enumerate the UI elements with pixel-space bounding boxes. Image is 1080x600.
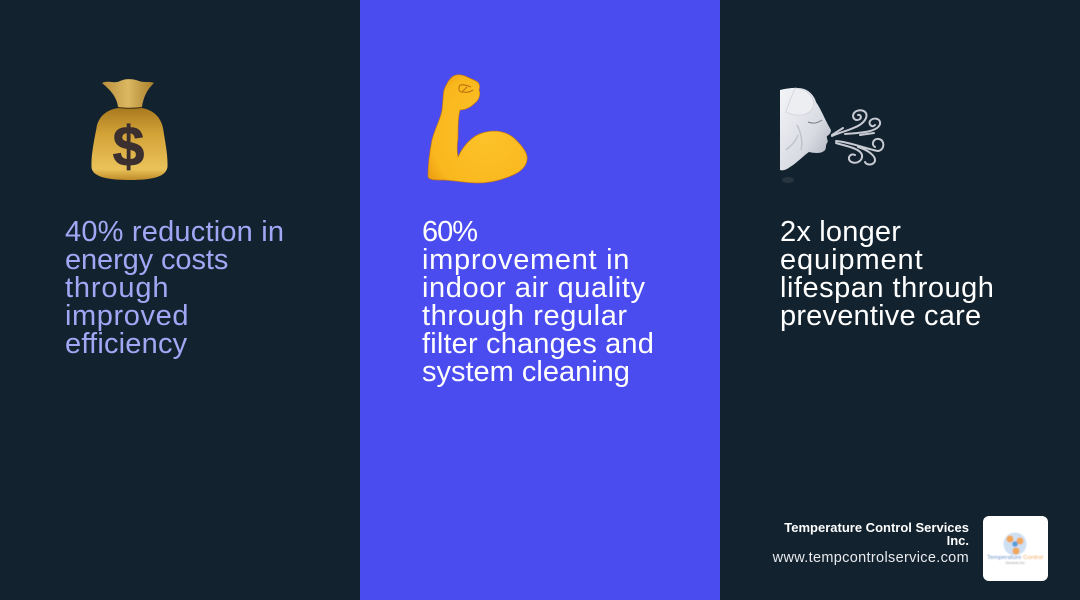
text: 40% reduction: through [65,272,169,304]
text: 60% improvement: improvement in [422,244,630,276]
logo: Services Inc. [1005,561,1026,565]
company name: Temperature Control Services [784,520,969,535]
text: 2x longer: lifespan through [780,272,994,304]
text: 60% improvement [422,216,654,388]
logo [983,516,1048,581]
text: 40% reduction: 40% reduction in [65,216,284,248]
text: 2x longer [780,216,994,332]
website: www.tempcontrolservice.com [773,550,969,566]
text: 2x longer: preventive care [780,300,981,332]
text: 60% improvement: system cleaning [422,356,630,388]
text: 60% improvement: indoor air quality [422,272,646,304]
text: 2x longer: equipment [780,244,924,276]
icon: wind face [780,88,884,183]
text: 60% improvement: through regular [422,300,628,332]
text: 40% reduction: improved [65,300,189,332]
text: 40% reduction: energy costs [65,244,228,276]
panel: air quality [360,0,720,600]
company name: Inc. [947,533,969,548]
panel: energy costs [0,0,360,600]
text: 60% improvement: filter changes and [422,328,654,360]
icon: flexed biceps [428,74,528,184]
logo: Temperature Control [987,555,1043,561]
text: 40% reduction: efficiency [65,328,187,360]
panel: equipment lifespan [720,0,1080,600]
company name [784,520,969,548]
text: 2x longer: 2x longer [780,216,901,248]
text: 60% improvement: 60% [422,216,477,248]
icon: money bag: $ [113,115,144,179]
text: 40% reduction [65,216,284,360]
footer brand [772,516,1048,581]
